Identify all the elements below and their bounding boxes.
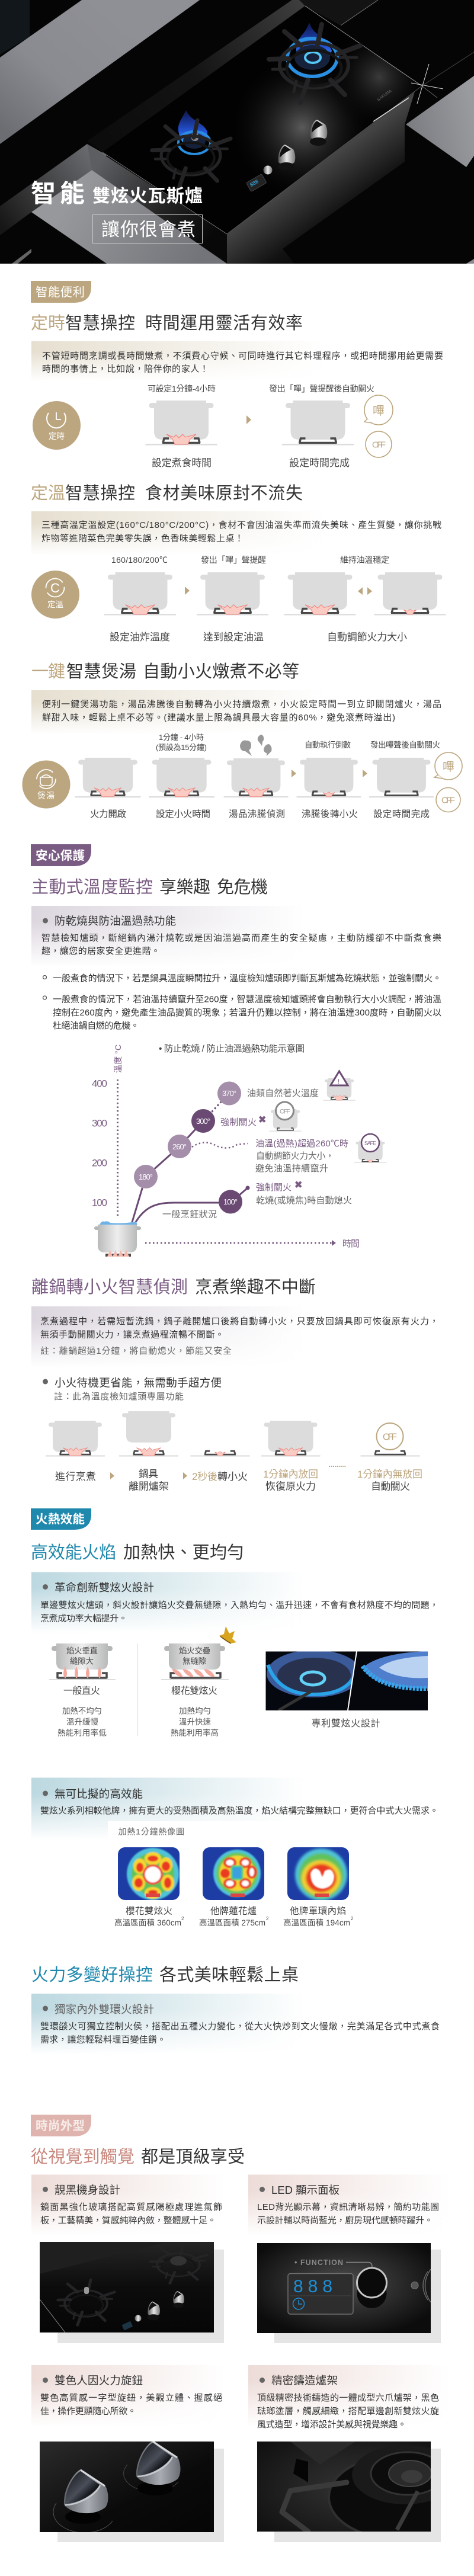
icon: soup badge xyxy=(23,761,70,808)
photo: LED panel: • FUNCTION xyxy=(294,2258,343,2267)
comparison: standard flame: 焰火垂直 xyxy=(66,1646,98,1655)
panel: timer description: 不管短時間烹調或長時間燉煮，不須費心守候、可同時進行其它料理程序，或把時間挪用給更需要 xyxy=(42,351,443,361)
comparison: standard flame: 熱能利用率低 xyxy=(57,1728,107,1737)
callout: off xyxy=(436,788,460,812)
heading: 從視覺到觸覺: 都是頂級享受 xyxy=(141,2147,245,2167)
thermal image: other brand lotus: 他牌蓮花爐 xyxy=(210,1905,257,1916)
panel: precision casting: 風式造型，增添設計美感與視覺樂趣。 xyxy=(257,2419,406,2430)
soup diagram: 火力開啟 xyxy=(90,809,126,819)
chart: temperature protection: 自動調節火力大小， xyxy=(256,1151,334,1161)
comparison: double flame: 焰火交疊 xyxy=(179,1646,210,1655)
panel: soup description xyxy=(31,690,450,735)
standby diagram: 鍋具 xyxy=(139,1468,158,1480)
panel: soup description: 鮮甜入味，輕鬆上桌不必等。(建議水量上限為鍋具最大容量的60%，避免滾煮時溢出) xyxy=(42,712,395,723)
panel: double flame design: 單邊雙炫火爐頭，斜火設計讓焰火交疊無縫隙，入熱均勻、溫升迅速，不會有食材熟度不均的問題， xyxy=(40,1600,438,1610)
chart: temperature protection: 避免油溫持續竄升 xyxy=(255,1164,328,1174)
hero title xyxy=(31,180,203,243)
heading: 主動式溫度監控: 享樂趣 xyxy=(159,877,210,897)
panel: dual colour knob: 雙色高質感一字型旋鈕，美觀立體、握感絕 xyxy=(40,2392,222,2403)
temperature diagram: 設定油炸溫度 xyxy=(110,632,170,643)
panel: temperature description: 炸物等進階菜色完美零失誤，色香味美輕鬆上桌！ xyxy=(41,533,244,544)
panel: LED display: LED背光顯示幕，資訊清晰易辨，簡約功能圖 xyxy=(257,2202,439,2212)
panel: precision casting xyxy=(248,2365,450,2430)
comparison: double flame: 加熱均勻 xyxy=(179,1706,211,1716)
heading: 高效能火焰: 加熱快、更均勻 xyxy=(123,1543,244,1562)
temperature diagram: 160/180/200℃ xyxy=(111,555,168,565)
temperature diagram: 發出「嗶」聲提醒 xyxy=(201,555,266,565)
thermal image: other brand lotus: 高溫區面積 275cm xyxy=(199,1918,265,1927)
heading: 定時智慧操控: 定時 xyxy=(31,313,65,333)
callout: beep bubble: 嗶 xyxy=(373,405,385,418)
photo: black glass body xyxy=(40,2242,224,2343)
panel: black body xyxy=(31,2174,225,2236)
tag: 時尚外型: 時尚外型 xyxy=(36,2119,85,2133)
panel: double flame design: 革命創新雙炫火設計 xyxy=(55,1581,154,1594)
heading: 定溫智慧操控: 定溫 xyxy=(31,483,65,503)
heading: 火力多變好操控 xyxy=(31,1965,299,1985)
temperature diagram xyxy=(104,555,446,643)
icon: crown xyxy=(219,1626,236,1643)
icon: warning pot: ! xyxy=(338,1078,340,1085)
panel: precision casting: 頂級精密技術鑄造的一體成型六爪爐架，黑色 xyxy=(257,2393,439,2403)
panel: dry-burn protection: 趣，讓您的居家安全更進階。 xyxy=(41,946,160,956)
knobs and display xyxy=(246,89,393,191)
panel: dry-burn protection: 防乾燒與防油溫過熱功能 xyxy=(55,915,176,927)
standby diagram: OFF xyxy=(383,1433,397,1442)
panel: dry-burn protection: 智慧檢知爐頭，斷絕鍋內湯汁燒乾或是因油溫過高而產生的安全疑慮，主動防護卻不中斷煮食樂 xyxy=(41,933,441,943)
callout: off: OFF xyxy=(441,795,455,806)
comparison: standard flame xyxy=(49,1643,116,1737)
heading: 主動式溫度監控: 免危機 xyxy=(217,877,268,897)
panel: dry-burn protection xyxy=(31,906,450,967)
temperature diagram: 自動調節火力大小 xyxy=(327,632,407,643)
soup diagram: 設定時間完成 xyxy=(373,809,430,819)
standby diagram: 離開爐架 xyxy=(129,1481,169,1492)
icon: soup badge: 煲湯 xyxy=(37,791,55,800)
panel: pot lift description: 無須手動開關火力，讓烹煮過程流暢不間斷。 xyxy=(40,1329,224,1340)
chart: temperature protection: 180° xyxy=(139,1172,153,1181)
icon: safe pot: SAFE xyxy=(364,1140,376,1146)
panel: black body: 靚黑機身設計 xyxy=(55,2184,120,2196)
panel: high efficiency xyxy=(31,1777,450,1840)
timer diagram: 可設定1分鐘-4小時 xyxy=(148,384,216,393)
chart: temperature protection: 370° xyxy=(222,1089,236,1098)
chart: temperature protection xyxy=(92,1043,386,1257)
heading: 一鍵智慧煲湯: 智慧煲湯 xyxy=(66,662,136,681)
chart: temperature protection: 100 xyxy=(92,1197,107,1209)
heading: 定時智慧操控 xyxy=(31,313,303,333)
chart: temperature protection: 時間 xyxy=(342,1239,360,1249)
list: protection details: 一般煮食的情況下，若油溫持續竄升至260度，智慧溫度檢知爐頭將會自動執行大小火調配，將油溫 xyxy=(53,994,441,1005)
comparison: double flame: 無縫隙 xyxy=(182,1657,206,1666)
panel: temperature description: 三種高溫定溫設定(160°C/180°C/200°C)，食材不會因油溫失準而流失美味、產生質變，讓你挑戰 xyxy=(41,520,441,530)
standby diagram: 進行烹煮 xyxy=(55,1470,96,1482)
panel: dual ring flame: 雙環燄火可獨立控制火侯，搭配出五種火力變化，從大火快炒到文火慢燉，完美滿足各式中式煮食 xyxy=(40,2021,440,2032)
thermal image: Sakura: 高溫區面積 360cm xyxy=(114,1918,181,1927)
soup diagram: 湯品沸騰偵測 xyxy=(229,809,285,819)
panel: LED display: 示設計輔以時尚藍光，廚房現代感頓時躍升。 xyxy=(257,2215,433,2225)
chart: temperature protection: 強制關火 xyxy=(220,1117,257,1127)
standby diagram: 自動關火 xyxy=(371,1481,410,1492)
panel: double flame design: 烹煮成功率大幅提升。 xyxy=(40,1613,127,1623)
comparison: double flame: 熱能利用率高 xyxy=(171,1728,219,1737)
list: protection details: 一般煮食的情況下，若是鍋具溫度瞬間拉升，溫度檢知爐頭即判斷瓦斯爐為乾燒狀態，並強制關火。 xyxy=(53,973,441,983)
panel: precision casting: 琺瑯塗層，觸感細緻，搭配單邊創新雙炫火旋 xyxy=(257,2405,439,2416)
heading: 定溫智慧操控 xyxy=(31,483,303,503)
callout: beep bubble xyxy=(434,752,462,780)
heading: 一鍵智慧煲湯: 一鍵 xyxy=(31,662,65,681)
tag: 時尚外型 xyxy=(31,2115,91,2136)
chart: temperature protection: 260° xyxy=(172,1142,187,1151)
icon: safe pot xyxy=(354,1134,386,1163)
panel: dual ring flame: 需求，讓您輕鬆料理百變佳餚。 xyxy=(40,2034,166,2045)
standby diagram: 2秒後 xyxy=(192,1471,217,1482)
chart: temperature protection: 300 xyxy=(92,1117,107,1129)
tag: 智能便利 xyxy=(31,281,91,303)
list: protection details: 杜絕油鍋自燃的危機。 xyxy=(53,1021,139,1031)
panel: dual ring flame: 獨家內外雙環火設計 xyxy=(55,2003,154,2016)
list: protection details: 控制在260度內，避免產生油品變質的現象；若溫升仍難以控制，將在油溫達300度時，自動關火以 xyxy=(53,1007,441,1018)
tag: 安心保護 xyxy=(31,844,91,866)
photo: cast burner xyxy=(257,2442,441,2542)
icon: temperature badge: C xyxy=(50,581,60,595)
standby diagram: 1分鐘內無放回 xyxy=(357,1469,422,1480)
thermal image: other brand lotus: 2 xyxy=(266,1916,269,1921)
caption: thermal images: 加熱1分鐘熱像圖 xyxy=(118,1827,184,1837)
comparison: standard flame: 一般直火 xyxy=(63,1686,100,1696)
tag: 智能便利: 智能便利 xyxy=(36,286,85,299)
hero title: 讓你很會煮 xyxy=(101,219,196,240)
panel: precision casting: 精密鑄造爐架 xyxy=(271,2375,338,2386)
panel: pot lift description: 烹煮過程中，若需短暫洗鍋，鍋子離開爐口後將自動轉小火，只要放回鍋具即可恢復原有火力， xyxy=(40,1316,438,1327)
thermal image: Sakura: 2 xyxy=(181,1916,184,1921)
comparison: standard flame: 縫隙大 xyxy=(70,1657,94,1666)
panel: timer description xyxy=(31,341,450,381)
chart: temperature protection: 強制關火 xyxy=(256,1183,292,1193)
standby diagram: 1分鐘內放回 xyxy=(263,1469,318,1480)
hero title: 雙炫火瓦斯爐 xyxy=(92,187,203,206)
heading: 從視覺到觸覺: 從視覺到觸覺 xyxy=(31,2147,134,2167)
panel: high efficiency: 無可比擬的高效能 xyxy=(55,1788,143,1800)
soup diagram: 沸騰後轉小火 xyxy=(302,809,358,819)
knobs and display: SAKURA xyxy=(376,89,393,102)
chart: temperature protection: 100° xyxy=(223,1197,238,1206)
subheading: standby xyxy=(43,1377,222,1402)
chart: temperature protection: 油類自然著火溫度 xyxy=(247,1088,319,1098)
heading: 離鍋轉小火智慧偵測: 烹煮樂趣不中斷 xyxy=(195,1277,316,1297)
comparison: double flame: 櫻花雙炫火 xyxy=(171,1685,217,1696)
photo: patented burner xyxy=(265,1650,428,1710)
thermal image: other brand lotus xyxy=(199,1847,269,1927)
icon: timer badge: 定時 xyxy=(49,431,65,441)
panel: LED display xyxy=(248,2174,450,2236)
knobs and display: 888 xyxy=(249,178,260,188)
list: protection details xyxy=(43,973,441,1031)
comparison: standard flame: 溫升緩慢 xyxy=(66,1718,98,1726)
standby diagram: 轉小火 xyxy=(217,1471,248,1482)
chart: temperature protection: 乾燒(或燒焦)時自動熄火 xyxy=(256,1196,352,1206)
panel: pot lift description xyxy=(31,1306,450,1367)
heading: 從視覺到觸覺 xyxy=(31,2147,245,2167)
comparison: double flame xyxy=(137,1643,229,1737)
hero title: 智能 xyxy=(31,180,85,207)
thermal image: other brand single ring: 高溫區面積 194cm xyxy=(283,1918,350,1927)
panel: black body: 鏡面黑強化玻璃搭配高質感陽極處理進氣飾 xyxy=(40,2202,222,2212)
photo: LED panel: 888 xyxy=(293,2277,332,2296)
thermal image: Sakura xyxy=(114,1847,184,1927)
icon: warning pot xyxy=(323,1071,356,1101)
callout: beep bubble: 嗶 xyxy=(443,761,454,774)
soup diagram: 1分鐘 - 4小時 xyxy=(159,733,204,742)
heading: 高效能火焰: 高效能火焰 xyxy=(31,1543,116,1562)
panel: dual colour knob xyxy=(31,2365,225,2427)
caption: patented burner: 專利雙炫火設計 xyxy=(312,1718,380,1729)
icon: off pot: OFF xyxy=(280,1108,290,1115)
thermal image: other brand single ring: 他牌單環內焰 xyxy=(290,1905,346,1916)
callout: off xyxy=(366,431,392,457)
chart: temperature protection: 200 xyxy=(92,1158,107,1168)
heading: 定溫智慧操控: 食材美味原封不流失 xyxy=(145,483,303,503)
panel: pot lift description: 註：離鍋超過1分鐘，將自動熄火，節能又安全 xyxy=(40,1345,232,1356)
heading: 一鍵智慧煲湯 xyxy=(31,662,299,681)
icon: temperature badge xyxy=(31,571,79,619)
temperature diagram: 維持油溫穩定 xyxy=(340,555,389,565)
heading: 高效能火焰 xyxy=(31,1543,244,1562)
soup diagram xyxy=(75,733,440,819)
timer diagram: 設定煮食時間 xyxy=(152,457,212,469)
callout: off: OFF xyxy=(372,440,386,450)
thermal image: Sakura: 櫻花雙炫火 xyxy=(126,1905,172,1916)
chart: temperature protection: • 防止乾燒 / 防止油溫過熱功能示意圖 xyxy=(159,1043,305,1054)
panel: soup description: 便利一鍵煲湯功能，湯品沸騰後自動轉為小火持續燉煮，小火設定時間一到立即關閉爐火，湯品 xyxy=(42,699,441,710)
soup diagram: 發出嗶聲後自動關火 xyxy=(370,740,440,749)
icon: timer badge xyxy=(33,401,81,450)
heading: 離鍋轉小火智慧偵測 xyxy=(31,1277,316,1297)
chart: temperature protection: ✖ xyxy=(294,1180,302,1190)
heading: 火力多變好操控: 火力多變好操控 xyxy=(31,1965,153,1985)
soup diagram: 自動執行倒數 xyxy=(305,741,351,749)
heading: 火力多變好操控: 各式美味輕鬆上桌 xyxy=(159,1965,299,1985)
heading: 主動式溫度監控: 主動式溫度監控 xyxy=(31,877,153,897)
comparison: standard flame: 加熱不均勻 xyxy=(62,1706,102,1716)
chart: temperature protection: 一般烹飪狀況 xyxy=(162,1209,217,1219)
callout: beep bubble xyxy=(364,395,393,425)
heading: 離鍋轉小火智慧偵測: 離鍋轉小火智慧偵測 xyxy=(31,1277,188,1297)
photo: knobs xyxy=(40,2441,224,2542)
soup diagram: 設定小火時間 xyxy=(156,809,210,819)
heading: 定溫智慧操控: 智慧操控 xyxy=(65,483,135,503)
icon: large pot xyxy=(94,1221,141,1257)
panel: LED display: LED 顯示面板 xyxy=(271,2184,340,2196)
temperature diagram: 達到設定油溫 xyxy=(203,632,264,643)
chart: temperature protection: ✖ xyxy=(258,1115,266,1125)
panel: double flame design xyxy=(31,1572,450,1633)
subheading: standby: 註：此為溫度檢知爐頭專屬功能 xyxy=(54,1392,184,1402)
heading: 一鍵智慧煲湯: 自動小火燉煮不必等 xyxy=(143,662,299,681)
panel: timer description: 時間的事情上，比如說，陪伴你的家人！ xyxy=(42,364,209,374)
front burner xyxy=(152,110,230,187)
heading: 定時智慧操控: 智慧操控 xyxy=(65,313,135,333)
panel: dual colour knob: 佳，操作更顯隨心所欲。 xyxy=(40,2407,136,2416)
photo: LED panel xyxy=(257,2243,441,2343)
timer diagram: 設定時間完成 xyxy=(289,457,350,469)
icon: temperature badge: 定溫 xyxy=(47,600,63,609)
chart: temperature protection: 400 xyxy=(92,1078,107,1089)
heading: 定時智慧操控: 時間運用靈活有效率 xyxy=(145,313,303,333)
subheading: standby: 小火待機更省能，無需動手超方便 xyxy=(55,1377,222,1389)
icon: off pot xyxy=(269,1102,302,1132)
panel: dual ring flame xyxy=(31,1994,450,2055)
timer diagram: 發出「嗶」聲提醒後自動關火 xyxy=(269,384,374,393)
panel: black body: 板，工藝精美，質感純粹內斂，整體感十足。 xyxy=(40,2215,216,2225)
tag: 火熱效能 xyxy=(31,1508,91,1530)
thermal image: other brand single ring: 2 xyxy=(351,1916,354,1921)
heading: 主動式溫度監控 xyxy=(31,877,268,897)
standby diagram: 恢復原火力 xyxy=(265,1481,316,1492)
back burner xyxy=(269,23,360,102)
thermal image: other brand single ring xyxy=(283,1847,354,1927)
chart: temperature protection: 溫度 °C xyxy=(113,1045,123,1073)
panel: dual colour knob: 雙色人因火力旋鈕 xyxy=(55,2375,143,2386)
hero photo: stove on geometric background xyxy=(0,0,474,264)
comparison: double flame: 溫升快速 xyxy=(179,1718,211,1726)
tag: 火熱效能: 火熱效能 xyxy=(36,1513,85,1526)
standby diagram xyxy=(46,1411,422,1492)
chart: temperature protection: 油溫(過熱)超過260℃時 xyxy=(255,1139,348,1149)
panel: temperature description xyxy=(31,511,450,555)
timer diagram xyxy=(146,384,374,469)
tag: 安心保護: 安心保護 xyxy=(36,848,85,863)
panel: high efficiency: 雙炫火系列相較他牌，擁有更大的受熱面積及高熱溫度，焰火結構完整無缺口，更符合中式大火需求。 xyxy=(40,1805,438,1816)
chart: temperature protection: 300° xyxy=(196,1117,210,1126)
soup diagram: (預設為15分鐘) xyxy=(156,743,207,752)
